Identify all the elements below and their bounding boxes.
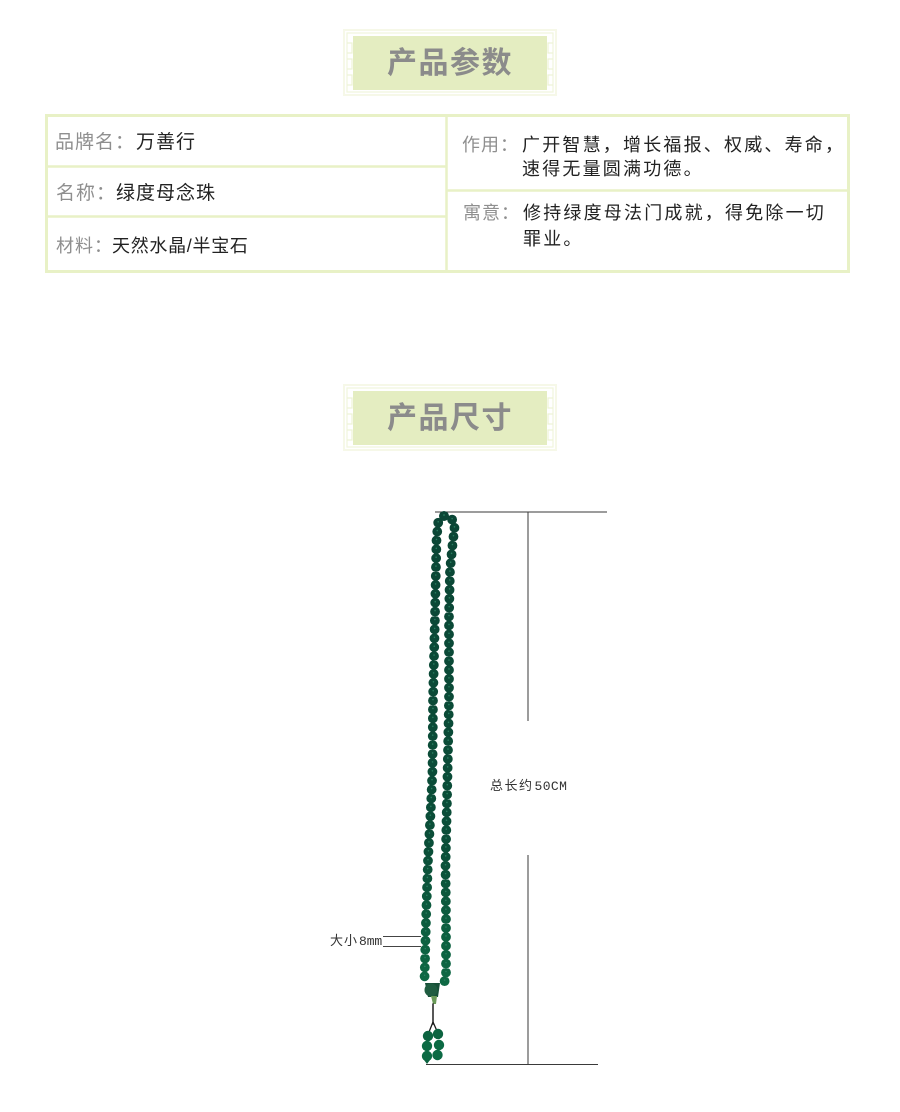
bead size leader lines xyxy=(383,936,421,946)
dimension lines: total length xyxy=(426,512,607,1064)
row: material xyxy=(56,232,249,258)
text: 天然水晶/半宝石 xyxy=(112,236,249,256)
row: meaning: 修持绿度母法门成就，得免除一切 xyxy=(523,203,826,223)
row: function: 速得无量圆满功德。 xyxy=(522,159,704,179)
row: function xyxy=(462,131,845,179)
row: material: 材料： xyxy=(56,232,113,258)
bead necklace xyxy=(422,515,454,1064)
banner heading: product size xyxy=(343,384,557,451)
banner heading: product parameters xyxy=(343,29,557,96)
row: product name xyxy=(56,178,216,205)
label: bead size: 大小 xyxy=(330,933,358,948)
label: total length: 总长约 xyxy=(490,778,534,793)
row: function: 作用： xyxy=(462,131,519,157)
label: total length: 50CM xyxy=(534,779,567,794)
text: 万善行 xyxy=(136,132,196,153)
banner heading: product parameters: 产品参数 xyxy=(387,47,513,80)
row: meaning: 寓意： xyxy=(463,199,520,225)
banner heading: product size: 产品尺寸 xyxy=(387,402,513,435)
guru bead and tassel xyxy=(422,983,444,1064)
label: bead size: 8mm xyxy=(359,934,382,949)
row: product name: 名称： xyxy=(56,178,116,205)
row: meaning: 罪业。 xyxy=(523,229,584,249)
row: brand name xyxy=(55,127,196,154)
text: 绿度母念珠 xyxy=(116,183,216,204)
row: meaning xyxy=(463,199,826,249)
row: function: 广开智慧，增长福报、权威、寿命， xyxy=(522,135,845,155)
row: brand name: 品牌名： xyxy=(55,127,135,154)
parameter table xyxy=(45,114,850,273)
